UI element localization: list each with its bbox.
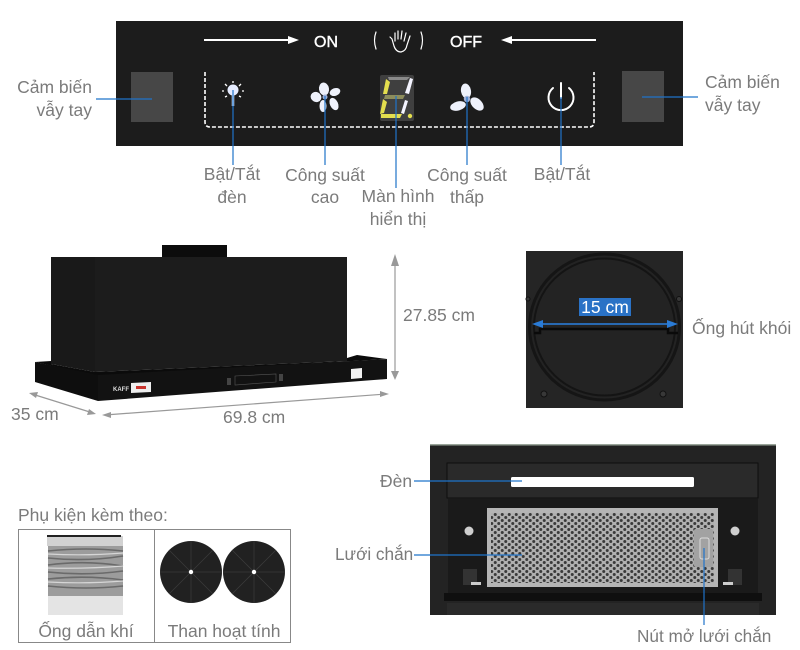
panel: control panel: [116, 21, 683, 146]
ring: [530, 254, 680, 400]
image: air duct: [47, 535, 123, 615]
text: right sensor label: Cảm biến: [705, 72, 780, 92]
text: depth: 35 cm: [11, 404, 59, 424]
text: display: Màn hình: [362, 186, 434, 206]
text: high power: Công suất: [285, 165, 365, 185]
hinges: [463, 569, 477, 585]
callout lines: underside: [414, 481, 704, 625]
icon: lamp: [222, 81, 244, 106]
base side: [35, 362, 98, 401]
bottom lip: [444, 593, 762, 601]
panel: underside photo: [430, 444, 776, 615]
text: filter release: Nút mở lưới chắn: [637, 626, 771, 646]
text: air duct: Ống dẫn khí: [38, 620, 134, 641]
dimension arrows: [29, 254, 399, 418]
hood front: [95, 257, 347, 372]
lamp: [511, 477, 694, 487]
badges: [131, 382, 151, 393]
text: charcoal: Than hoạt tính: [168, 621, 280, 641]
text: height: 27.85 cm: [403, 305, 475, 325]
text: accessories heading: Phụ kiện kèm theo:: [18, 505, 168, 525]
text: filter: Lưới chắn: [335, 544, 413, 564]
text: exhaust label: Ống hút khói: [692, 317, 791, 338]
text: low power: Công suất: [427, 165, 507, 185]
icon: low fan: [449, 83, 486, 113]
text: width: 69.8 cm: [223, 407, 285, 427]
arrow: ON: [204, 36, 299, 44]
base top: [35, 355, 387, 376]
duct collar: [162, 245, 227, 258]
diameter arrow: [532, 320, 678, 328]
text: lamp toggle: đèn: [217, 187, 247, 207]
diameter label: [579, 298, 631, 316]
dashed touch area: [205, 72, 594, 127]
interior: [448, 499, 758, 593]
icon: digit display: [380, 75, 414, 121]
text: left sensor label: vẫy tay: [37, 99, 92, 120]
label: ON: ON: [314, 34, 338, 51]
text: low power: thấp: [450, 187, 484, 207]
icon: high fan: [309, 82, 341, 112]
arrow: OFF: [501, 36, 596, 44]
sensor: right: [622, 71, 664, 122]
hood side: [51, 257, 95, 372]
text: power toggle: Bật/Tắt: [534, 163, 590, 184]
image: charcoal filters: [160, 541, 285, 603]
text: lamp: Đèn: [380, 471, 412, 491]
base front: [98, 359, 387, 401]
text: high power: cao: [311, 187, 339, 207]
filter: [487, 508, 718, 587]
callout lines: control panel: [96, 90, 698, 188]
text: display: hiển thị: [370, 209, 426, 229]
text: left sensor label: Cảm biến: [17, 77, 92, 97]
label: OFF: OFF: [450, 34, 482, 51]
sensor: left: [131, 72, 173, 122]
text: right sensor label: vẫy tay: [705, 94, 761, 115]
panel: accessories: [18, 530, 290, 642]
hood illustration: KAFF: [113, 387, 129, 393]
panel: exhaust port: 15 cm: [581, 297, 629, 317]
filter handle: [694, 529, 713, 567]
screws: [464, 526, 474, 536]
screws: [526, 296, 682, 397]
hood illustration: [35, 245, 387, 401]
lamp band: [447, 463, 758, 498]
icon: power: [548, 83, 573, 110]
cross bar: [534, 329, 678, 333]
panel: exhaust port: [526, 251, 683, 408]
icon: wave hand: [374, 31, 422, 52]
text: lamp toggle: Bật/Tắt: [204, 163, 260, 184]
